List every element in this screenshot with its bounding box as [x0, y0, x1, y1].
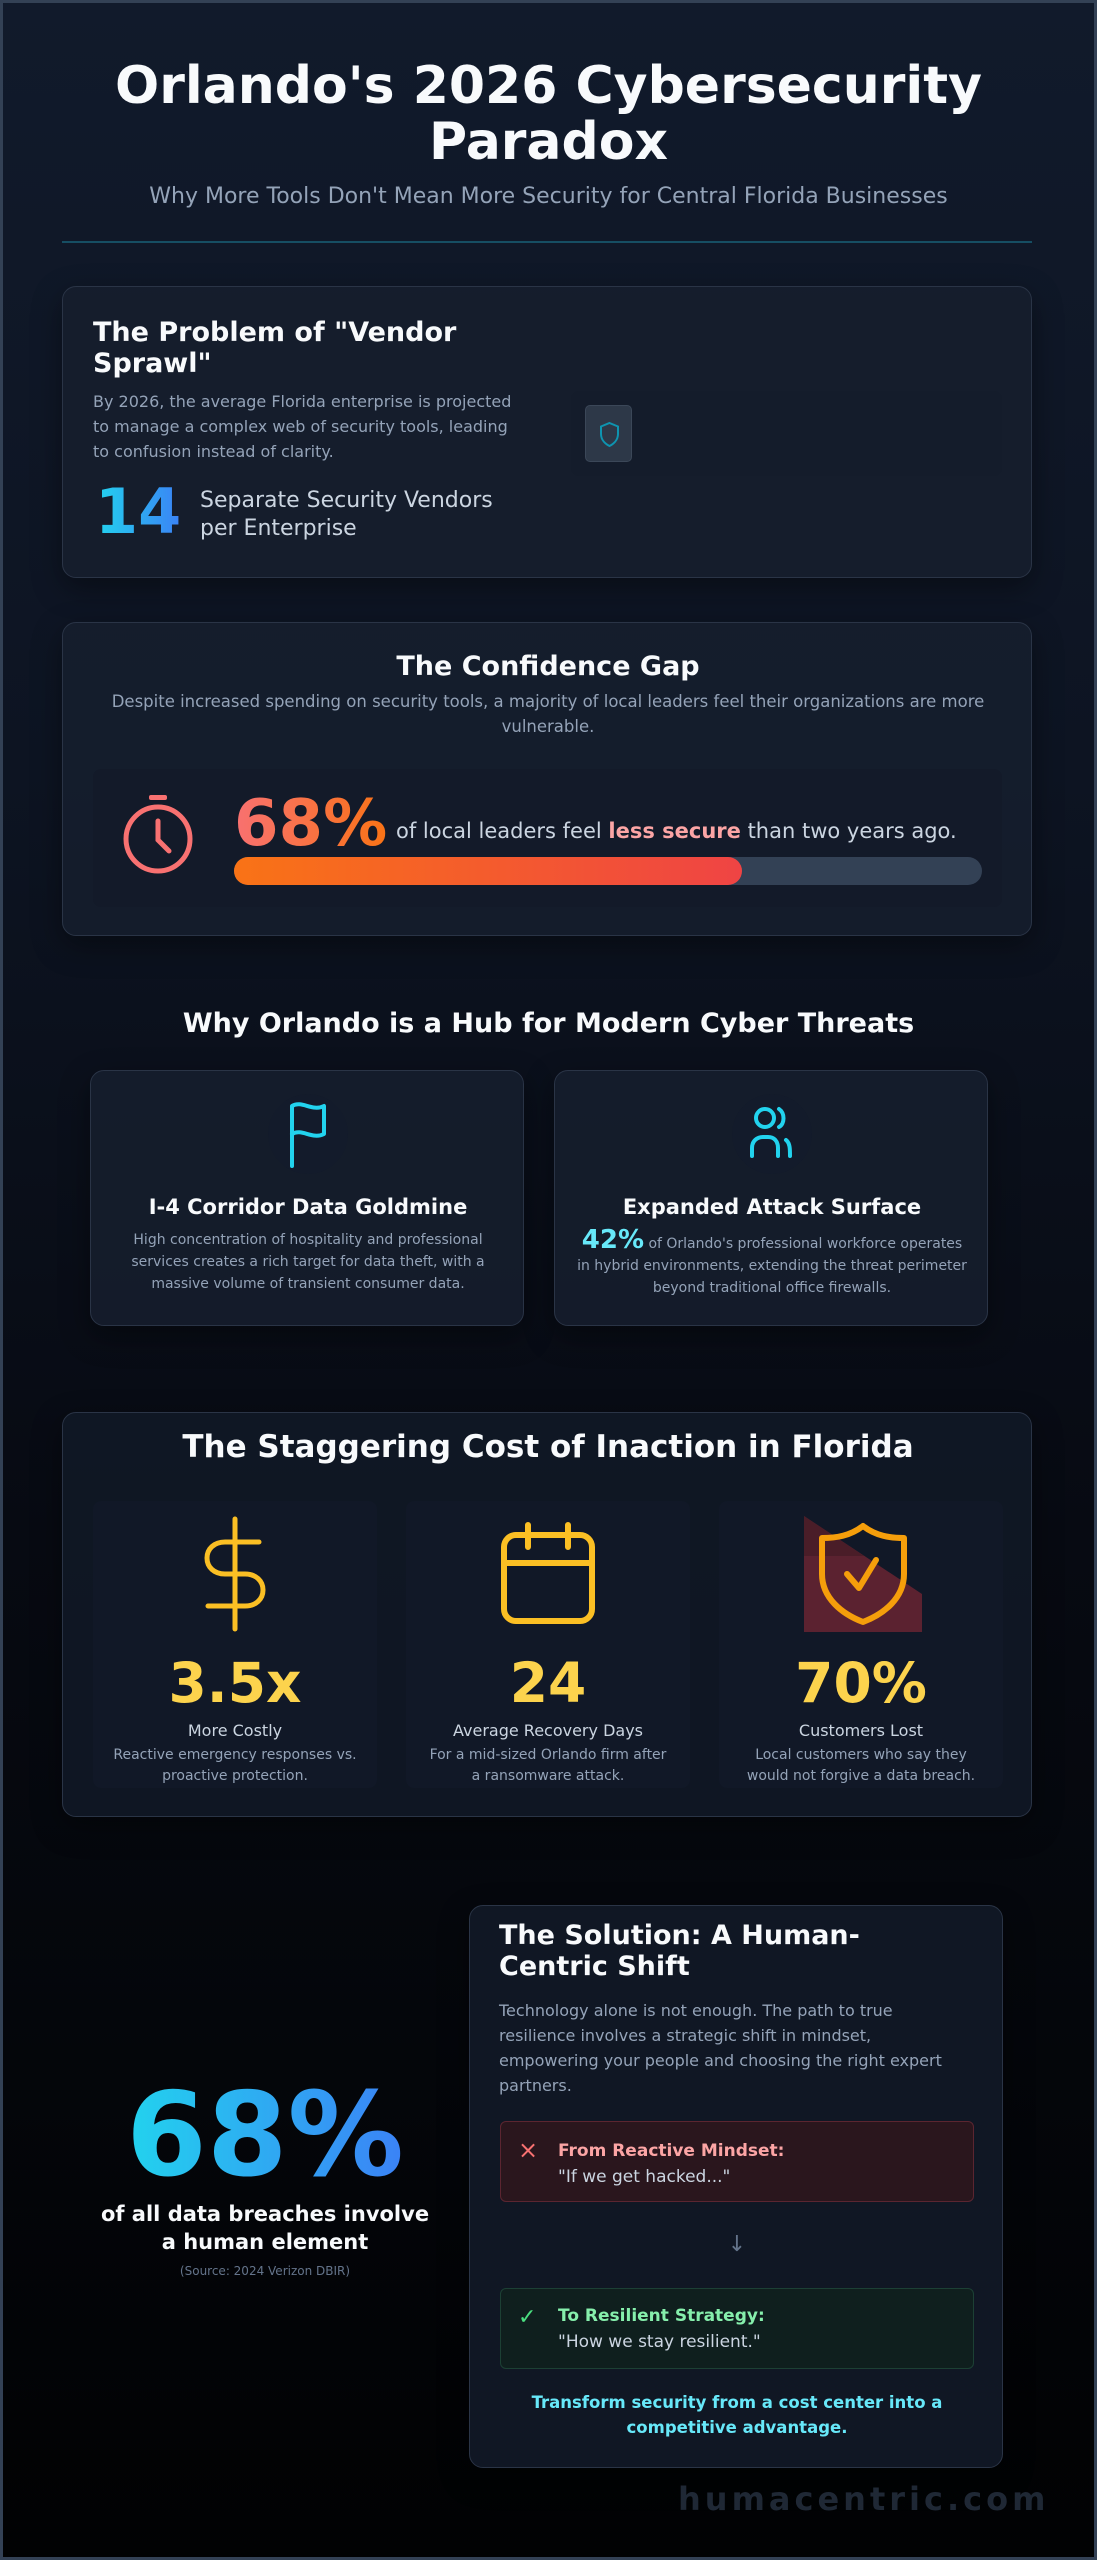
- callout: reactive mindset: ×: [518, 2136, 538, 2164]
- stat: 70%: would not forgive a data breach.: [747, 1768, 975, 1784]
- title: Paradox: [429, 112, 668, 172]
- panel: cost of inaction: [62, 1412, 1032, 1817]
- text: vendor sprawl description: By 2026, the average Florida enterprise is projected to manage a complex web of security tools, leading to confusion instead of clarity.: [93, 392, 511, 461]
- progress bar: [234, 857, 982, 885]
- stat: 24 days: For a mid-sized Orlando firm after: [430, 1747, 666, 1763]
- callout: resilient strategy: To Resilient Strategy:: [558, 2306, 765, 2326]
- stat: 70%: 70%: [795, 1651, 927, 1715]
- stat: 14 vendors: 14: [95, 475, 181, 548]
- text: transform: Transform security from a cost center into a competitive advantage.: [532, 2393, 942, 2437]
- stat: 24 days: 24: [510, 1651, 586, 1715]
- callout: reactive mindset: From Reactive Mindset:: [558, 2141, 784, 2161]
- stat box: 68% less secure: [93, 769, 1002, 907]
- stat: 3.5x: 3.5x: [169, 1651, 301, 1715]
- text: confidence description: Despite increased spending on security tools, a majority of local leaders feel their organizations are more vulnerable.: [112, 692, 984, 736]
- watermark: humacentric.com: [678, 2480, 1049, 2518]
- stat: 70%: Local customers who say they: [755, 1747, 967, 1763]
- stat: 14 vendors: [95, 475, 493, 548]
- stat: 68% human element: a human element: [162, 2230, 368, 2254]
- icon: dollar: [204, 1516, 266, 1632]
- stat: 70%: [719, 1501, 1003, 1788]
- panel: confidence gap: [62, 622, 1032, 936]
- title: Orlando's 2026 Cybersecurity: [115, 56, 982, 116]
- icon: shield check: [804, 1516, 922, 1632]
- stat: 24 days: a ransomware attack.: [472, 1768, 624, 1784]
- card title: Expanded Attack Surface: [623, 1195, 921, 1219]
- stat: 14 vendors: Separate Security Vendors: [200, 488, 493, 513]
- heading: confidence gap: The Confidence Gap: [396, 651, 700, 682]
- heading: why orlando: Why Orlando is a Hub for Modern Cyber Threats: [183, 1008, 914, 1039]
- callout: resilient strategy: ✓: [518, 2305, 536, 2330]
- heading: solution: The Solution: A Human-Centric Shift: [499, 1920, 860, 1982]
- vendor tool box: [571, 391, 1002, 476]
- arrow: down: ↓: [728, 2232, 746, 2257]
- card: I-4 corridor: [90, 1070, 524, 1326]
- stat: 3.5x: [93, 1501, 377, 1788]
- panel: vendor sprawl: [62, 286, 1032, 578]
- callout: reactive mindset: [500, 2121, 974, 2202]
- stat: 14 vendors: per Enterprise: [200, 516, 357, 541]
- stat: 3.5x: More Costly: [188, 1721, 282, 1740]
- icon: stopwatch: [124, 795, 192, 874]
- callout: resilient strategy: [500, 2288, 974, 2369]
- card text: 42% of Orlando's professional workforce operates in hybrid environments, extending the threat perimeter beyond traditional office firewalls.: [577, 1225, 967, 1296]
- callout: resilient strategy: "How we stay resilient.": [558, 2332, 761, 2352]
- icon: users: [732, 1094, 812, 1174]
- stat: 68% human element: (Source: 2024 Verizon DBIR): [180, 2264, 350, 2278]
- icon: flag: [268, 1094, 348, 1174]
- subtitle: Why More Tools Don't Mean More Security for Central Florida Businesses: [149, 184, 948, 209]
- icon: calendar: [501, 1522, 595, 1624]
- heading: vendor sprawl: The Problem of "Vendor Sprawl": [93, 317, 456, 379]
- stat: 68%: 68%: [234, 787, 387, 861]
- text: solution description: Technology alone is not enough. The path to true resilience involves a strategic shift in mindset, empowering your people and choosing the right expert partners.: [499, 2001, 942, 2095]
- panel: solution: [469, 1905, 1003, 2468]
- card title: I-4 Corridor Data Goldmine: [149, 1195, 467, 1219]
- stat: 3.5x: proactive protection.: [162, 1768, 308, 1784]
- title: [115, 56, 982, 172]
- icon: shield: [585, 405, 632, 462]
- text: less secure: of local leaders feel less secure than two years ago.: [396, 819, 957, 843]
- stat: 24 days: [406, 1501, 690, 1788]
- card: attack surface: [554, 1070, 988, 1326]
- card text: High concentration of hospitality and professional services creates a rich target for data theft, with a massive volume of transient consumer data.: [131, 1232, 485, 1292]
- stat: 24 days: Average Recovery Days: [453, 1721, 643, 1740]
- heading: cost: The Staggering Cost of Inaction in Florida: [182, 1429, 914, 1465]
- stat: 68% human element: of all data breaches involve: [101, 2202, 429, 2226]
- stat: 68% human element: [101, 2068, 429, 2278]
- stat: 68% human element: 68%: [126, 2068, 404, 2203]
- stat: 3.5x: Reactive emergency responses vs.: [113, 1747, 357, 1763]
- stat: 70%: Customers Lost: [799, 1721, 923, 1740]
- callout: reactive mindset: "If we get hacked...": [558, 2167, 730, 2187]
